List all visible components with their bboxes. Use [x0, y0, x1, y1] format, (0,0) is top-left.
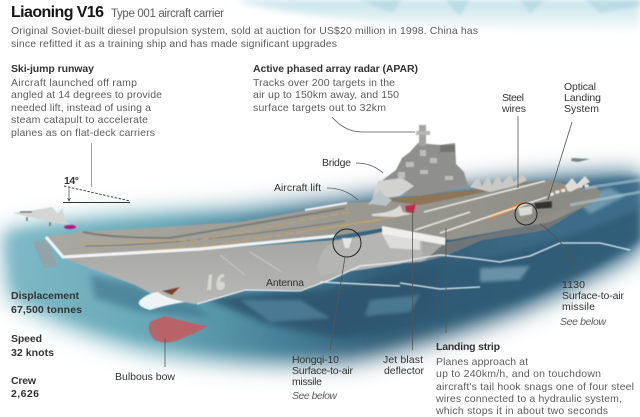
label: Hongqi-10 missile	[292, 229, 361, 402]
arrow: radar leader	[332, 117, 415, 132]
label: antenna: Antenna	[266, 277, 304, 289]
label: Hongqi-10 missile: Surface-to-air	[292, 365, 354, 377]
stern details	[520, 186, 600, 222]
text block: landing strip: up to 240km/h, and on touchdown	[436, 368, 601, 380]
deck	[45, 180, 600, 258]
label: 1130 missile: Surface-to-air	[562, 290, 624, 302]
text block: landing strip: wires connected to a hydraulic system,	[435, 393, 622, 405]
label: bridge	[322, 157, 383, 173]
ramp shading	[83, 208, 345, 238]
label: bulbous bow: Bulbous bow	[115, 371, 175, 383]
text block: ski-jump runway: steam catapult to accelerate	[11, 114, 148, 126]
text block: ski-jump runway: angled at 14 degrees to provide	[11, 89, 162, 101]
hull	[63, 198, 598, 304]
aft hull shadow	[425, 198, 598, 260]
brown deck area	[380, 180, 545, 205]
bow wave	[139, 292, 185, 310]
label: jet blast deflector	[383, 212, 424, 377]
sea	[2, 172, 640, 364]
label: steel wires: wires	[501, 103, 526, 115]
text block: active phased array radar	[253, 63, 418, 114]
label: 1130 missile: See below	[560, 316, 607, 328]
diagram: 14 degree ramp angle	[63, 143, 130, 202]
label: optical landing system	[548, 81, 601, 200]
text block: ski-jump runway: planes as on flat-deck carriers	[11, 127, 155, 139]
diagram: 14 degree ramp angle: 14°	[64, 175, 79, 187]
subtitle: Type 001 aircraft carrier	[111, 8, 224, 20]
text block: ski-jump runway	[11, 63, 162, 139]
label: 1130 missile: missile	[562, 301, 595, 313]
missile mounts	[342, 238, 352, 248]
jet on ramp	[12, 207, 72, 226]
specifications: 67,500 tonnes	[11, 304, 82, 316]
label: bridge: Bridge	[322, 157, 351, 169]
text block: active phased array radar: surface targets out to 32km	[253, 102, 386, 114]
specifications	[11, 290, 82, 400]
text block: landing strip: which stops it in about two seconds	[435, 405, 608, 417]
label: optical landing system: System	[564, 103, 599, 115]
text block: active phased array radar: Active phased array radar (APAR)	[253, 63, 418, 75]
text block: active phased array radar: air up to 150km away, and 150	[253, 89, 399, 101]
island superstructure	[380, 143, 468, 196]
sponson / jet blast deflector	[317, 232, 422, 275]
specifications: 2,626	[11, 388, 39, 400]
intro text	[11, 25, 478, 50]
label: 1130 missile	[515, 203, 624, 328]
intro text: since refitted it as a training ship and has made significant upgrades	[11, 38, 337, 50]
flag / pink marker	[405, 204, 416, 213]
label: optical landing system: Optical	[564, 81, 596, 93]
text block: ski-jump runway: needed lift, instead of using a	[11, 102, 151, 114]
title: Liaoning V16	[11, 4, 104, 21]
white deck lines	[415, 181, 547, 233]
text block: active phased array radar: Tracks over 200 targets in the	[253, 77, 395, 89]
bow net	[33, 240, 58, 268]
label: aircraft lift	[274, 182, 358, 200]
specifications: Displacement	[11, 290, 80, 302]
text block: landing strip: Planes approach at	[436, 356, 528, 368]
label: optical landing system: Landing	[564, 92, 601, 104]
label: Hongqi-10 missile: See below	[292, 390, 338, 402]
text block: landing strip	[435, 228, 634, 417]
label: bulbous bow	[115, 338, 175, 383]
hull number	[207, 274, 225, 290]
waves	[197, 243, 630, 304]
background: faded sky image	[235, 0, 640, 34]
parked aircraft by island	[368, 190, 392, 206]
intro text: Original Soviet-built diesel propulsion system, sold at auction for US$20 million in 1998. China has	[11, 25, 478, 37]
orange deck stripes	[80, 212, 380, 255]
text block: landing strip: aircraft's tail hook snags one of four steel	[436, 381, 634, 393]
hull markings	[162, 287, 180, 295]
text block: landing strip: Landing strip	[436, 341, 500, 353]
text block: ski-jump runway: Ski-jump runway	[11, 63, 94, 75]
label: jet blast deflector: deflector	[384, 365, 424, 377]
specifications: Crew	[11, 375, 37, 387]
label: steel wires	[501, 92, 526, 188]
parked aircraft aft	[470, 173, 527, 192]
label: jet blast deflector: Jet blast	[383, 354, 423, 366]
deck edge	[46, 236, 335, 257]
distant aircraft	[571, 158, 590, 162]
label: 1130 missile: 1130	[562, 279, 585, 291]
text block: ski-jump runway: Aircraft launched off ramp	[11, 77, 137, 89]
label: steel wires: Steel	[502, 92, 524, 104]
ship illustration	[12, 125, 640, 342]
label: Hongqi-10 missile: missile	[292, 376, 322, 388]
bulbous bow	[149, 316, 208, 342]
label: aircraft lift: Aircraft lift	[274, 182, 321, 194]
specifications: Speed	[11, 333, 42, 345]
label: Hongqi-10 missile: Hongqi-10	[292, 354, 339, 366]
specifications: 32 knots	[11, 347, 54, 359]
